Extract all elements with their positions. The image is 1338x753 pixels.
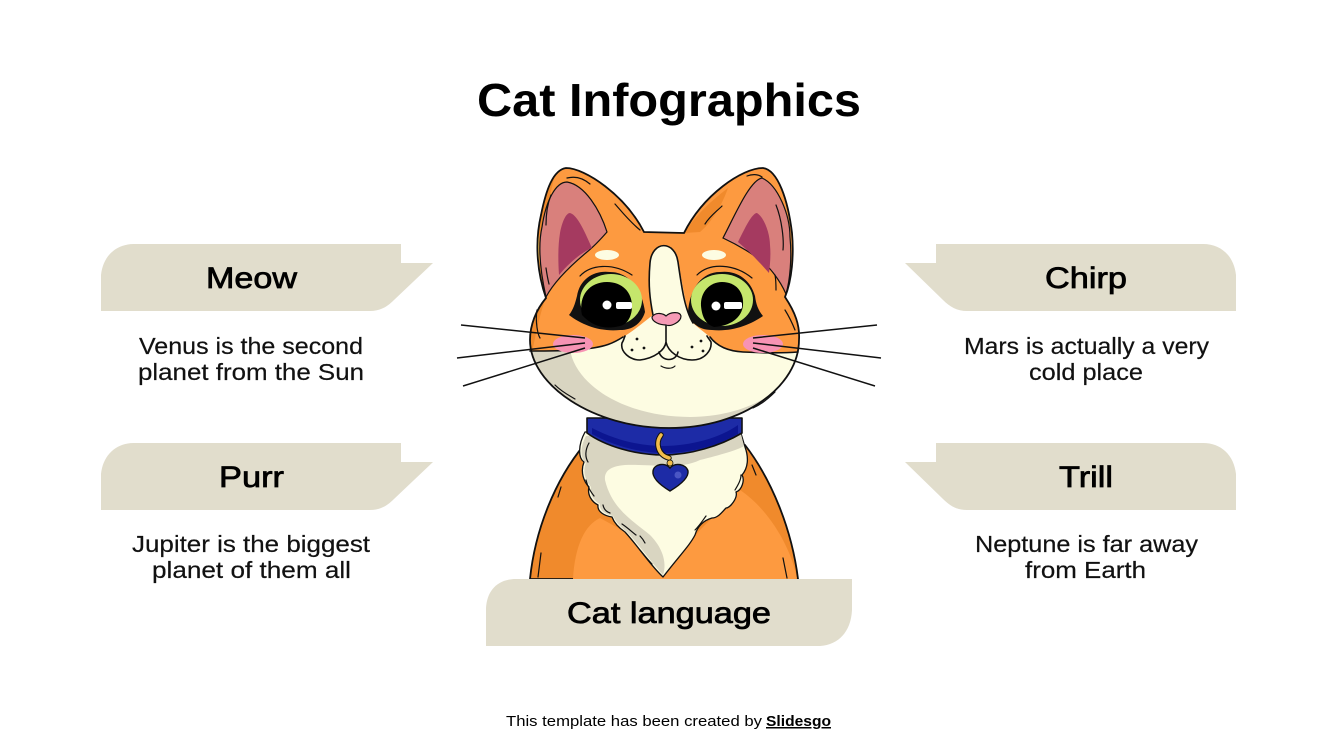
panel: Purr [101,443,433,583]
heading: Cat language: Cat language [567,597,771,630]
cat right eye [688,266,763,330]
text: Trill description [975,531,1199,583]
text: Meow description [138,333,364,385]
text: Trill description: Neptune is far away [975,531,1199,557]
footer credit: This template has been created by [506,713,763,730]
text: Purr description [132,531,371,583]
text: Chirp description [964,333,1210,385]
text: Trill description: from Earth [1025,557,1146,583]
panel: Trill [905,443,1236,583]
text: Purr description: Jupiter is the biggest [132,531,371,557]
panel: Cat language [486,579,852,646]
cat left eye [569,266,645,330]
text: Chirp description: Mars is actually a very [964,333,1210,359]
heading: Purr: Purr [219,461,284,494]
heading: Trill: Trill [1059,461,1113,494]
banner: Cat language [486,579,852,646]
text: Chirp description: cold place [1029,359,1143,385]
banner: Meow [101,244,433,311]
cat right whiskers [753,325,881,386]
banner: Trill [905,443,1236,510]
banner: Purr [101,443,433,510]
cat left ear [540,182,607,297]
heading: Meow: Meow [206,262,297,295]
cat right ear [723,178,791,294]
footer credit: Slidesgo [766,713,831,730]
cat muzzle and nose [622,313,711,368]
heading: Chirp: Chirp [1045,262,1127,295]
cat left blush [553,335,593,353]
title: Cat Infographics [477,74,861,126]
cat right blush [743,335,783,353]
text: Meow description: planet from the Sun [138,359,364,385]
panel: Chirp [905,244,1236,385]
text: Meow description: Venus is the second [139,333,363,359]
text: Purr description: planet of them all [152,557,351,583]
cat forehead highlights [595,250,726,260]
cat collar ring and heart tag [653,435,688,491]
cat chest fur [580,430,747,577]
cat left whiskers [457,325,585,386]
illustration: cat [457,160,881,579]
panel: Meow [101,244,433,385]
cat body [530,445,798,579]
banner: Chirp [905,244,1236,311]
cat head [525,160,810,428]
cat collar [587,418,742,455]
